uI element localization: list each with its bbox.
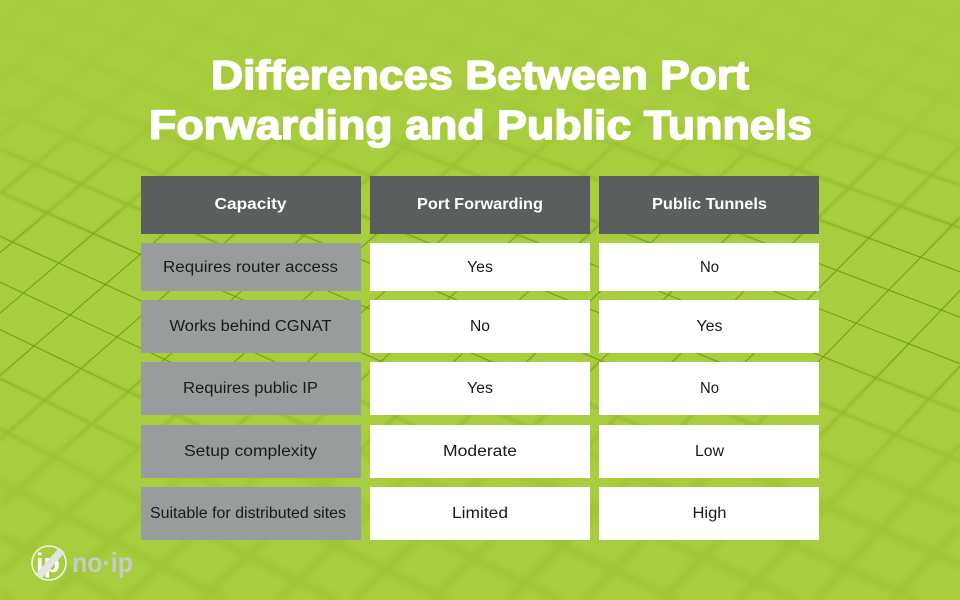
icon: no-ip circle badge: ip bbox=[36, 548, 60, 578]
row: setup complexity bbox=[141, 425, 819, 478]
row: requires router access: No bbox=[700, 259, 719, 276]
row: works behind CGNAT: No bbox=[470, 318, 490, 335]
row: suitable for distributed sites: Suitable for distributed sites bbox=[150, 505, 346, 522]
background: green perspective grid bbox=[0, 136, 960, 598]
row: requires public IP: Yes bbox=[467, 380, 493, 397]
logo wordmark: no·ip bbox=[72, 547, 133, 578]
title: Differences Between Port bbox=[211, 52, 749, 98]
row: works behind CGNAT bbox=[141, 300, 819, 353]
row: requires public IP bbox=[141, 362, 819, 415]
row: works behind CGNAT: Works behind CGNAT bbox=[170, 318, 332, 335]
row: works behind CGNAT: Yes bbox=[696, 318, 723, 335]
logo: no-ip bbox=[32, 546, 133, 580]
row: setup complexity: Moderate bbox=[443, 443, 517, 460]
row: requires router access: Yes bbox=[467, 259, 493, 276]
table header row: Capacity bbox=[214, 196, 287, 213]
row: suitable for distributed sites: Limited bbox=[452, 505, 508, 522]
row: requires public IP: Requires public IP bbox=[183, 380, 318, 397]
row: suitable for distributed sites: High bbox=[692, 505, 726, 522]
row: requires router access bbox=[141, 243, 819, 291]
row: requires router access: Requires router access bbox=[163, 259, 338, 276]
comparison table bbox=[141, 176, 819, 540]
table header row: Public Tunnels bbox=[652, 196, 767, 213]
table header row bbox=[141, 176, 819, 234]
row: setup complexity: Setup complexity bbox=[184, 443, 317, 460]
table header row: Port Forwarding bbox=[417, 196, 543, 213]
row: setup complexity: Low bbox=[695, 443, 725, 460]
row: suitable for distributed sites bbox=[141, 487, 819, 540]
title: Forwarding and Public Tunnels bbox=[149, 102, 812, 148]
row: requires public IP: No bbox=[700, 380, 719, 397]
title bbox=[149, 52, 812, 148]
